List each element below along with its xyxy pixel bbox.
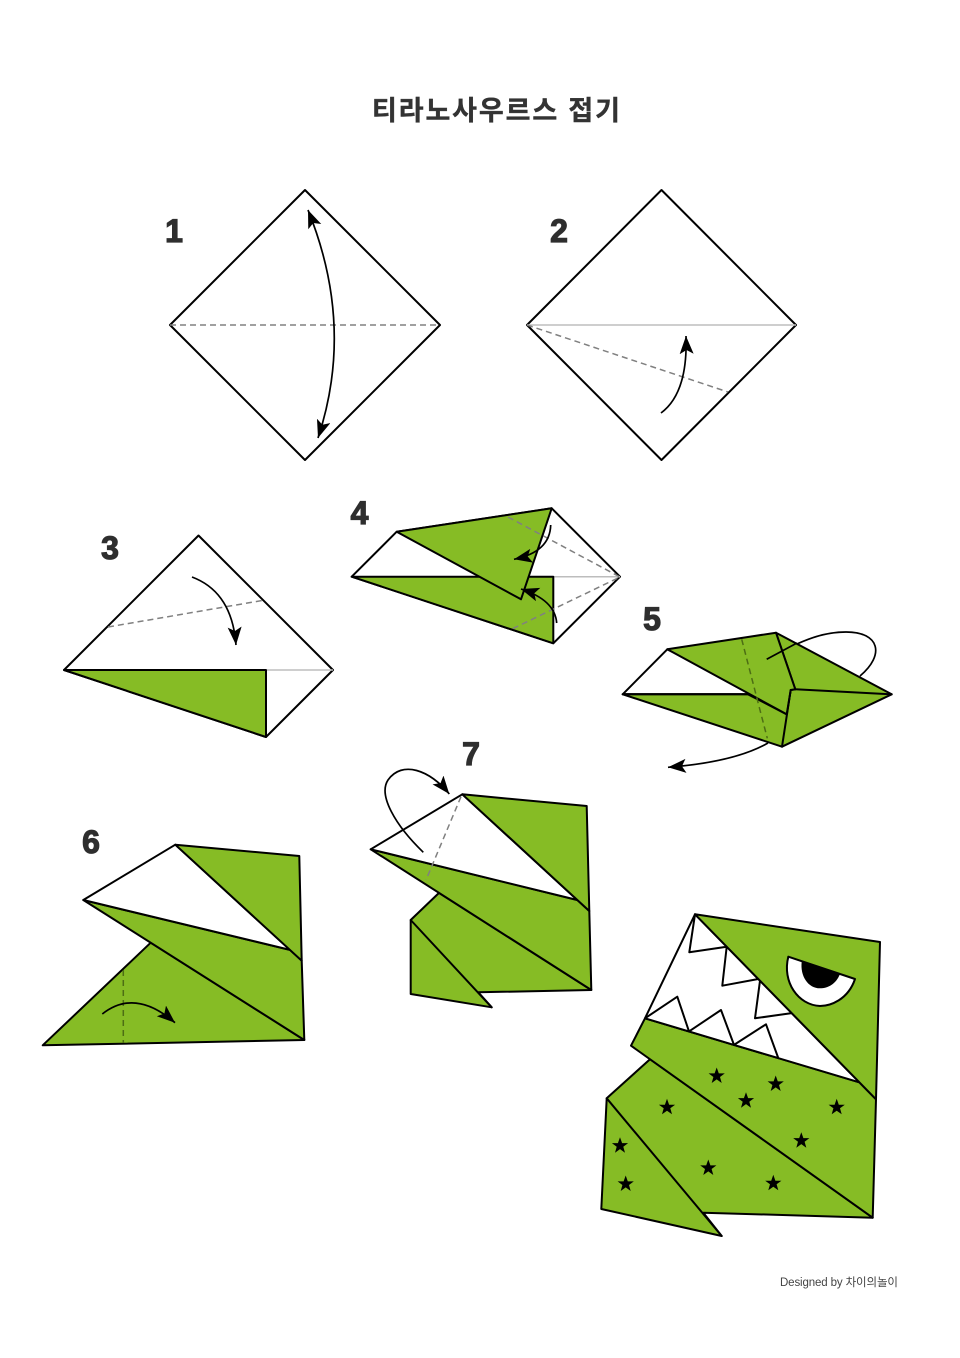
green folded flap bbox=[64, 670, 266, 737]
step 4 bbox=[351, 495, 620, 643]
stars bbox=[612, 1068, 845, 1191]
green lower body bbox=[601, 1059, 873, 1236]
step number 3: 3 bbox=[101, 530, 119, 566]
step 7 bbox=[371, 736, 591, 1007]
fold line bbox=[426, 797, 461, 880]
fold line bbox=[170, 324, 440, 326]
step 2 bbox=[527, 190, 796, 460]
green lower flap bbox=[352, 577, 553, 643]
green body bbox=[623, 633, 892, 747]
title: 티라노사우르스 접기 bbox=[372, 96, 620, 126]
eye bbox=[787, 957, 855, 1006]
arrow segment over paper bbox=[767, 643, 797, 659]
white mouth bbox=[623, 649, 760, 694]
step 5 bbox=[623, 601, 892, 767]
fold lines bbox=[508, 517, 620, 629]
crease bbox=[554, 576, 620, 578]
leg crease bbox=[607, 1098, 722, 1236]
fold edges bbox=[623, 689, 892, 747]
step 6 bbox=[43, 824, 304, 1045]
paper outline bbox=[352, 508, 620, 643]
credit: Designed by 차이의놀이 bbox=[780, 1276, 898, 1289]
arrow: fold up bbox=[661, 336, 686, 413]
arrow: back fold bbox=[767, 632, 876, 676]
step number 6: 6 bbox=[82, 824, 100, 860]
arrow: lower fold bbox=[521, 589, 557, 623]
green lower body bbox=[43, 943, 304, 1045]
arrow: fold behind bbox=[668, 743, 768, 767]
crease bbox=[267, 669, 333, 671]
step number 5: 5 bbox=[643, 601, 661, 637]
green head bbox=[462, 794, 589, 911]
leg crease bbox=[411, 920, 492, 1007]
green upper flap bbox=[397, 508, 552, 599]
green lower body bbox=[411, 893, 591, 1007]
white mouth bbox=[371, 794, 577, 900]
step number 1: 1 bbox=[165, 213, 183, 249]
finished tyrannosaurus bbox=[601, 914, 880, 1236]
paper shape bbox=[64, 536, 333, 737]
green head bbox=[175, 845, 302, 961]
green upper flap bbox=[667, 633, 795, 714]
fold line bbox=[108, 600, 265, 627]
arrow: fold down bbox=[192, 577, 236, 645]
fold line bbox=[527, 325, 728, 392]
green back bbox=[631, 1018, 876, 1218]
white mouth bbox=[645, 914, 859, 1082]
lower teeth bbox=[645, 997, 778, 1058]
step number 7: 7 bbox=[462, 736, 480, 772]
center crease bbox=[527, 324, 796, 326]
step number 2: 2 bbox=[550, 213, 568, 249]
step 3 bbox=[64, 530, 333, 737]
upper teeth bbox=[689, 914, 792, 1018]
arrow: fold up and down bbox=[308, 210, 334, 438]
green back bbox=[83, 900, 304, 1040]
arrow: upper fold bbox=[514, 525, 551, 559]
arrow: fold right bbox=[102, 1003, 175, 1023]
green head bbox=[695, 914, 880, 1099]
paper diamond bbox=[170, 190, 440, 460]
paper diamond bbox=[527, 190, 796, 460]
fold line bbox=[122, 970, 124, 1043]
arrow: fold over bbox=[385, 769, 449, 852]
pupil bbox=[801, 962, 840, 988]
step number 4: 4 bbox=[351, 495, 369, 531]
fold line bbox=[742, 639, 767, 738]
step 1 bbox=[165, 190, 440, 460]
green back bbox=[371, 849, 591, 990]
white mouth bbox=[83, 845, 290, 950]
